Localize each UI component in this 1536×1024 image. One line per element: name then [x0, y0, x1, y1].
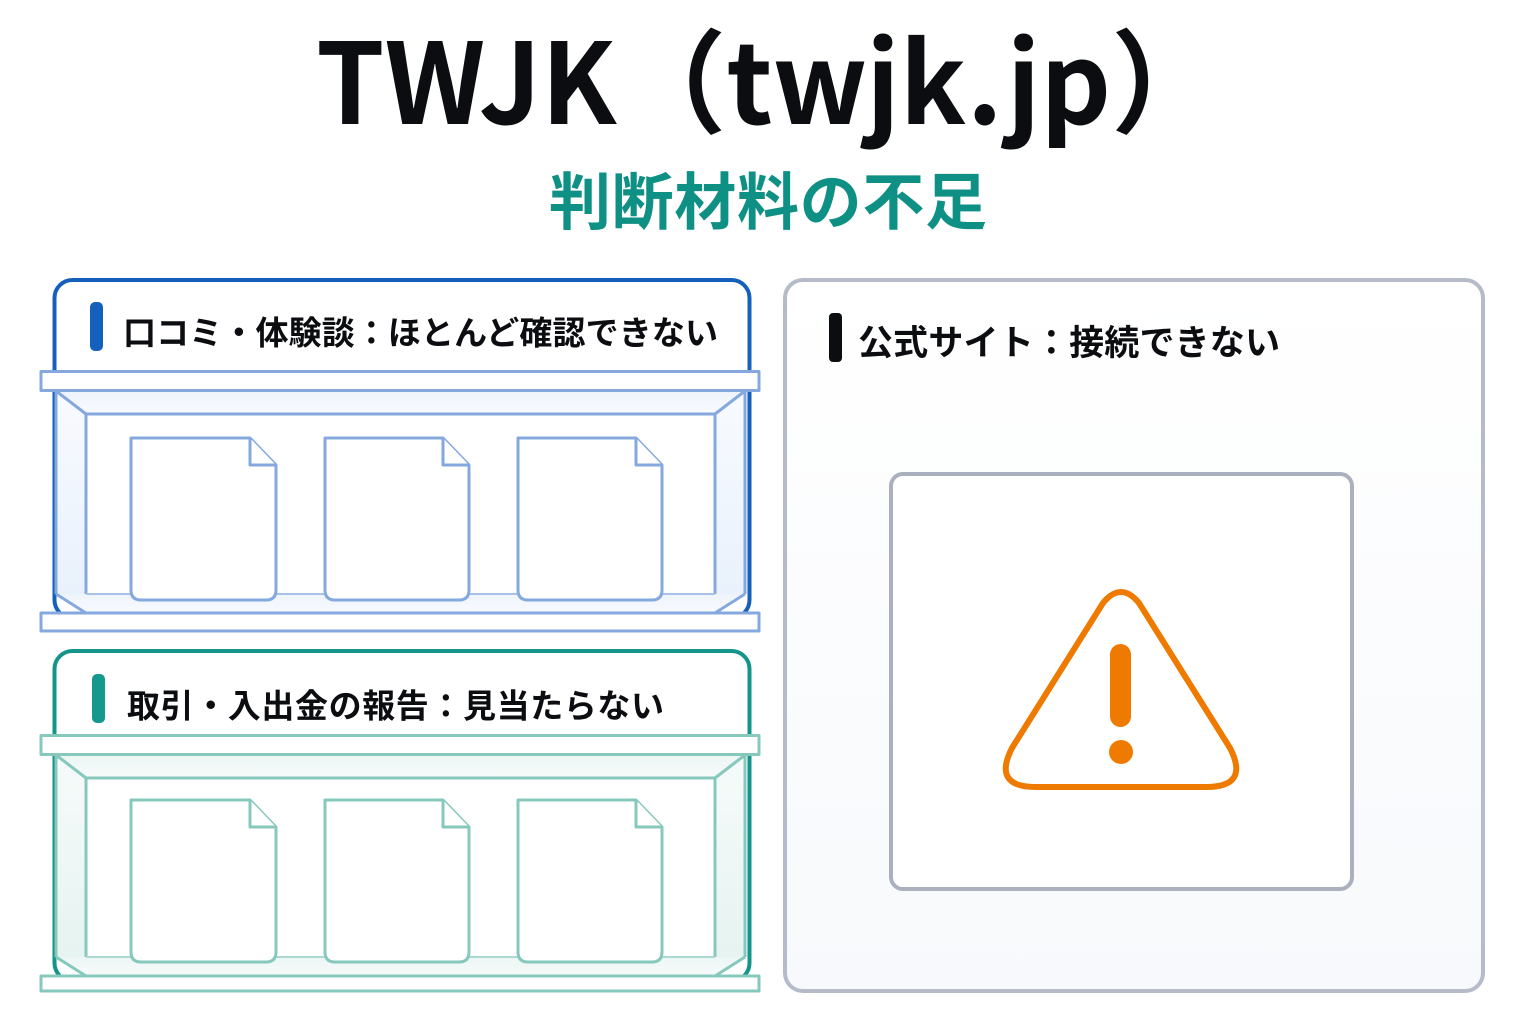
panel: reviews — [41, 280, 759, 631]
document 3 — [518, 800, 662, 962]
heading: transactions: 取引・入出金の報告：見当たらない — [127, 680, 664, 728]
document 1 — [131, 438, 276, 600]
panel: transactions — [41, 651, 759, 991]
top shelf — [41, 736, 759, 754]
heading: reviews: 口コミ・体験談：ほとんど確認できない — [123, 306, 718, 354]
box interior walls — [56, 755, 745, 976]
document 2 — [325, 438, 469, 600]
icon: warning triangle — [1006, 592, 1236, 787]
box interior walls — [56, 391, 745, 613]
document 2 — [325, 800, 469, 962]
bottom shelf — [41, 976, 759, 991]
top shelf — [41, 372, 759, 390]
heading: official site: 公式サイト：接続できない — [858, 315, 1280, 366]
panel frame: official site — [785, 280, 1483, 991]
bottom shelf — [41, 613, 759, 631]
accent bar: transactions — [92, 674, 105, 723]
illustration: open box with documents — [41, 736, 759, 991]
accent bar: reviews — [90, 302, 103, 351]
accent bar: official site — [829, 313, 842, 362]
panel: official site — [785, 280, 1483, 991]
document 1 — [131, 800, 276, 962]
subtitle: 判断材料の不足 — [549, 152, 987, 242]
error window — [891, 474, 1352, 889]
document 3 — [518, 438, 662, 600]
panel frame: reviews — [54, 280, 750, 618]
illustration: open box with documents — [41, 372, 759, 631]
panel frame: transactions — [54, 651, 750, 981]
